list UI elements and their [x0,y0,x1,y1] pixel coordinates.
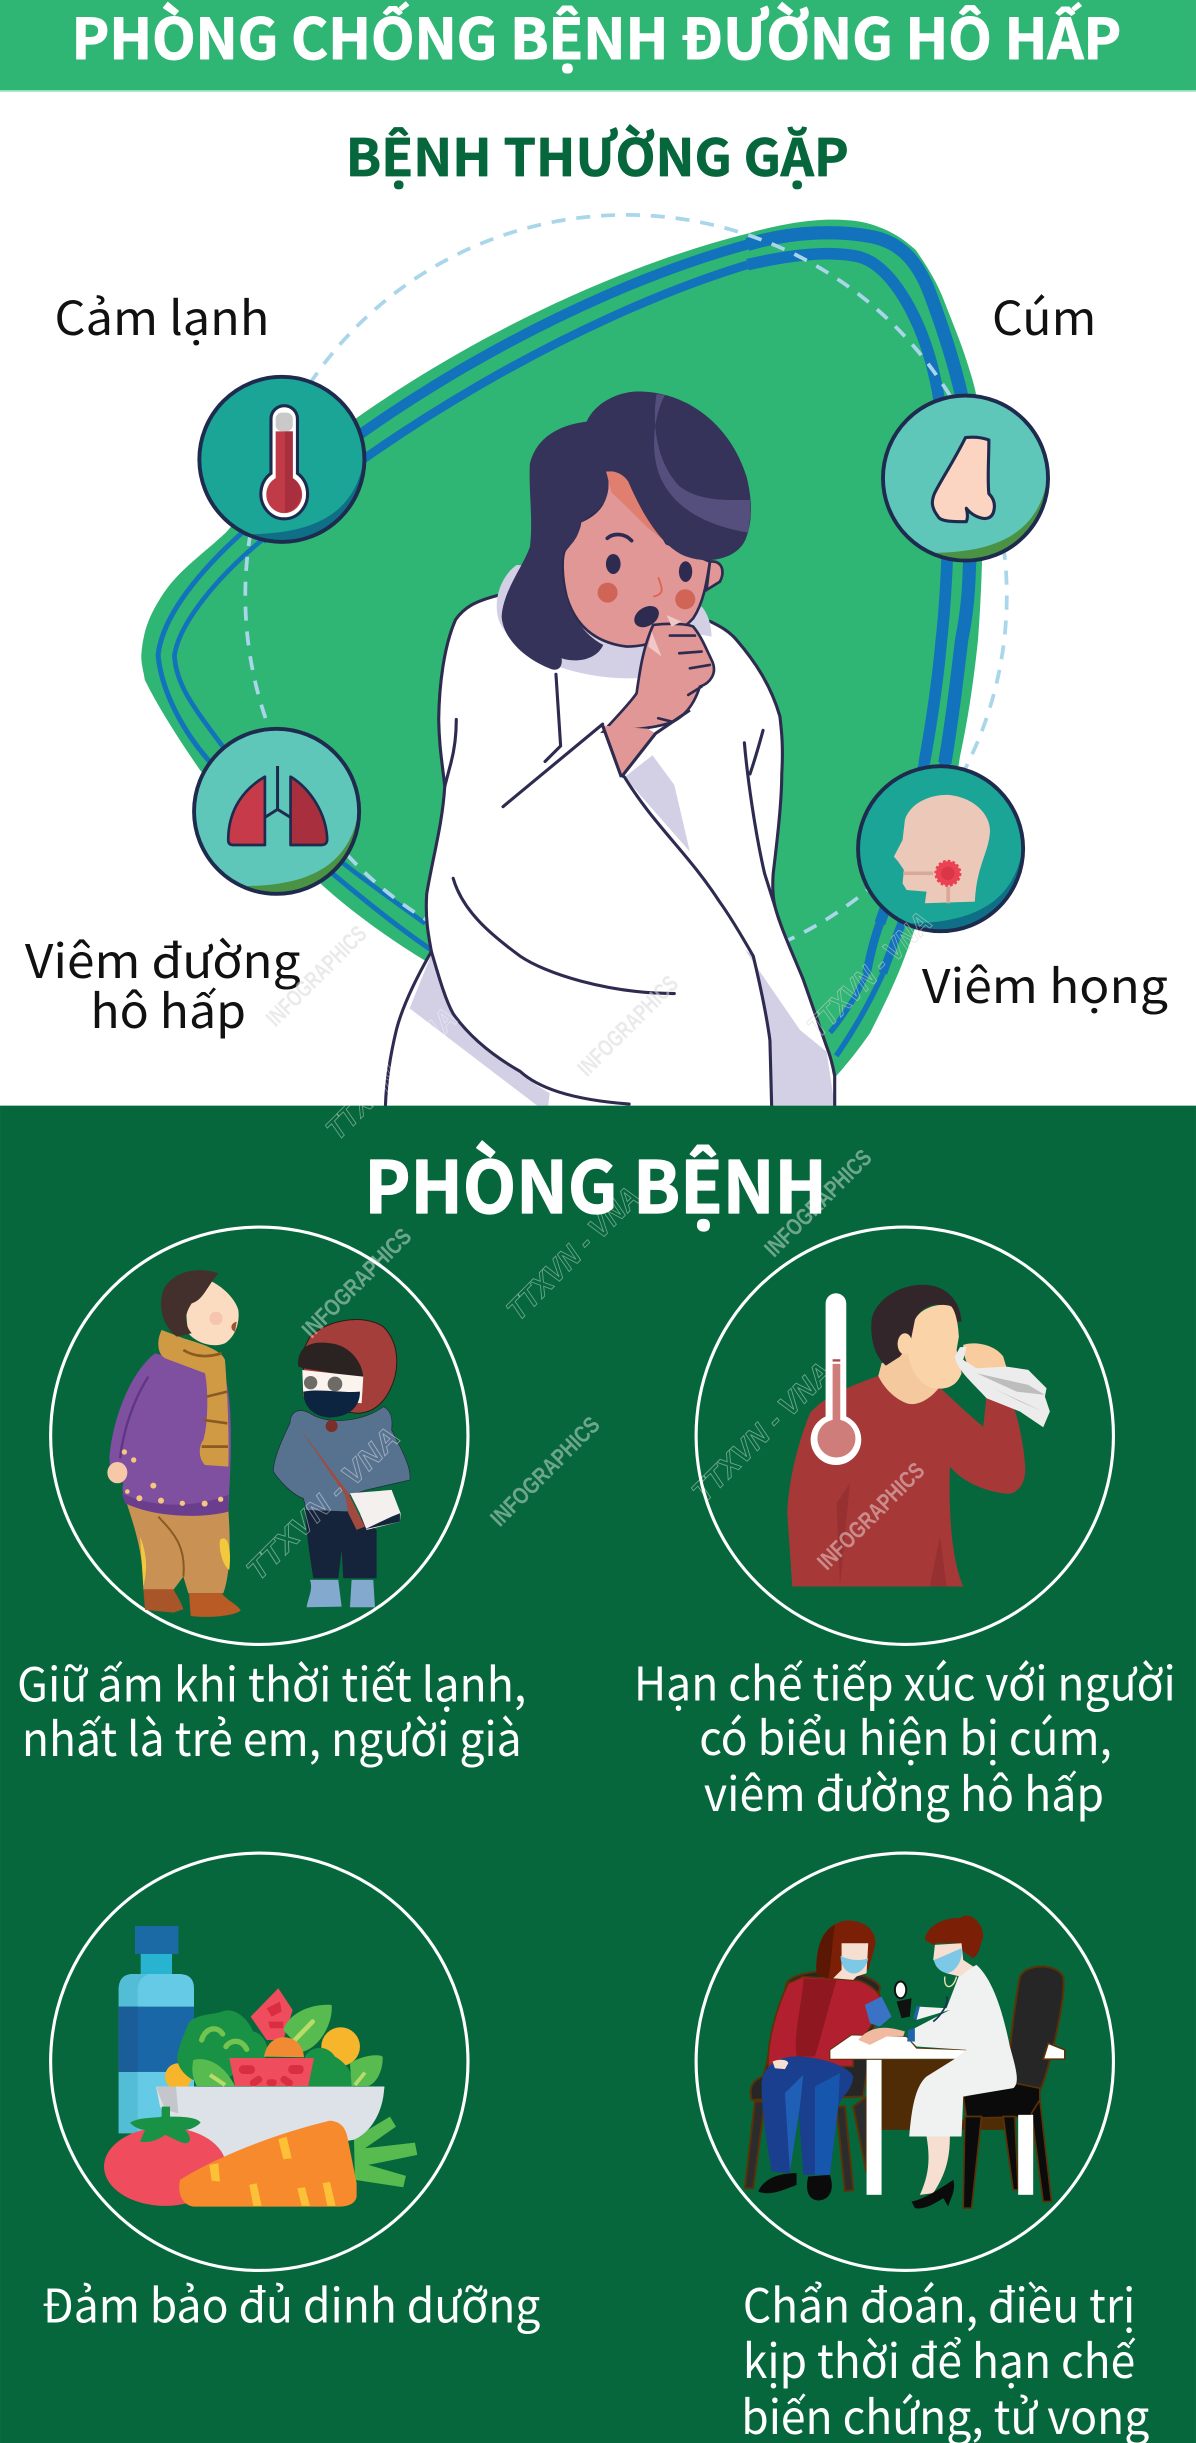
watermarks: INFOGRAPHICS [759,1144,877,1262]
text: limit contact: Hạn chế tiếp xúc với người [634,1648,1176,1715]
illustration: elderly and child in winter clothes [107,1270,410,1617]
circle: limit contact [696,1227,1113,1644]
icon: nose [883,394,1048,561]
text: limit contact [634,1648,1176,1825]
watermarks: INFOGRAPHICS [572,970,683,1081]
watermarks: INFOGRAPHICS [485,1411,605,1531]
dashed orbit ring [245,215,1007,976]
label: Cảm lạnh: Cảm lạnh [55,282,269,349]
text: limit contact: viêm đường hô hấp [704,1758,1104,1825]
text: keep warm [17,1648,526,1770]
text: limit contact: có biểu hiện bị cúm, [699,1702,1112,1769]
watermarks: INFOGRAPHICS [812,1457,930,1575]
watermarks: TTXVN - VNA [240,1421,407,1587]
watermarks: TTXVN - VNA [801,906,939,1044]
text: keep warm: nhất là trẻ em, người già [22,1703,522,1770]
heading: prevention: PHÒNG BỆNH [364,1130,827,1234]
label: Viêm họng: Viêm họng [922,950,1168,1017]
blanket body [385,595,835,1106]
label: Viêm đường hô hấp [25,925,301,1042]
watermarks: TTXVN - VNA [686,1356,839,1509]
label: Cúm: Cúm [992,282,1096,349]
watermarks: INFOGRAPHICS [297,1223,416,1343]
icon: thermometer [199,375,364,542]
heading: common diseases: BỆNH THƯỜNG GẶP [346,116,849,191]
watermarks [240,906,939,1587]
head and hand [497,391,751,732]
woman coughing [385,391,835,1106]
label: Viêm đường hô hấp: hô hấp [90,975,246,1042]
illustration: doctor checking patient's blood pressure [745,1916,1065,2208]
circle: nutrition [51,1853,468,2270]
circle: keep warm [51,1227,468,1644]
illustration: water bottle, salad bowl, tomato and carrot [104,1926,417,2207]
icon: lungs [194,727,359,894]
circle: diagnosis [696,1853,1113,2270]
icon: throat [858,765,1023,931]
illustration: sneezing man with thermometer [787,1285,1050,1587]
label: Viêm đường hô hấp: Viêm đường [25,925,301,992]
text: nutrition: Đảm bảo đủ dinh dưỡng [42,2270,540,2337]
text: diagnosis: kịp thời để hạn chế [743,2325,1135,2392]
watermarks: TTXVN - VNA [320,1002,464,1146]
panel: prevention [0,1106,1196,2443]
text: diagnosis: Chẩn đoán, điều trị [743,2270,1135,2337]
text: keep warm: Giữ ấm khi thời tiết lạnh, [17,1648,526,1715]
watermarks: TTXVN - VNA [500,1180,647,1327]
watermarks: INFOGRAPHICS [261,920,372,1031]
text: diagnosis [741,2270,1149,2443]
green blob with blue contour lines [141,220,983,1076]
